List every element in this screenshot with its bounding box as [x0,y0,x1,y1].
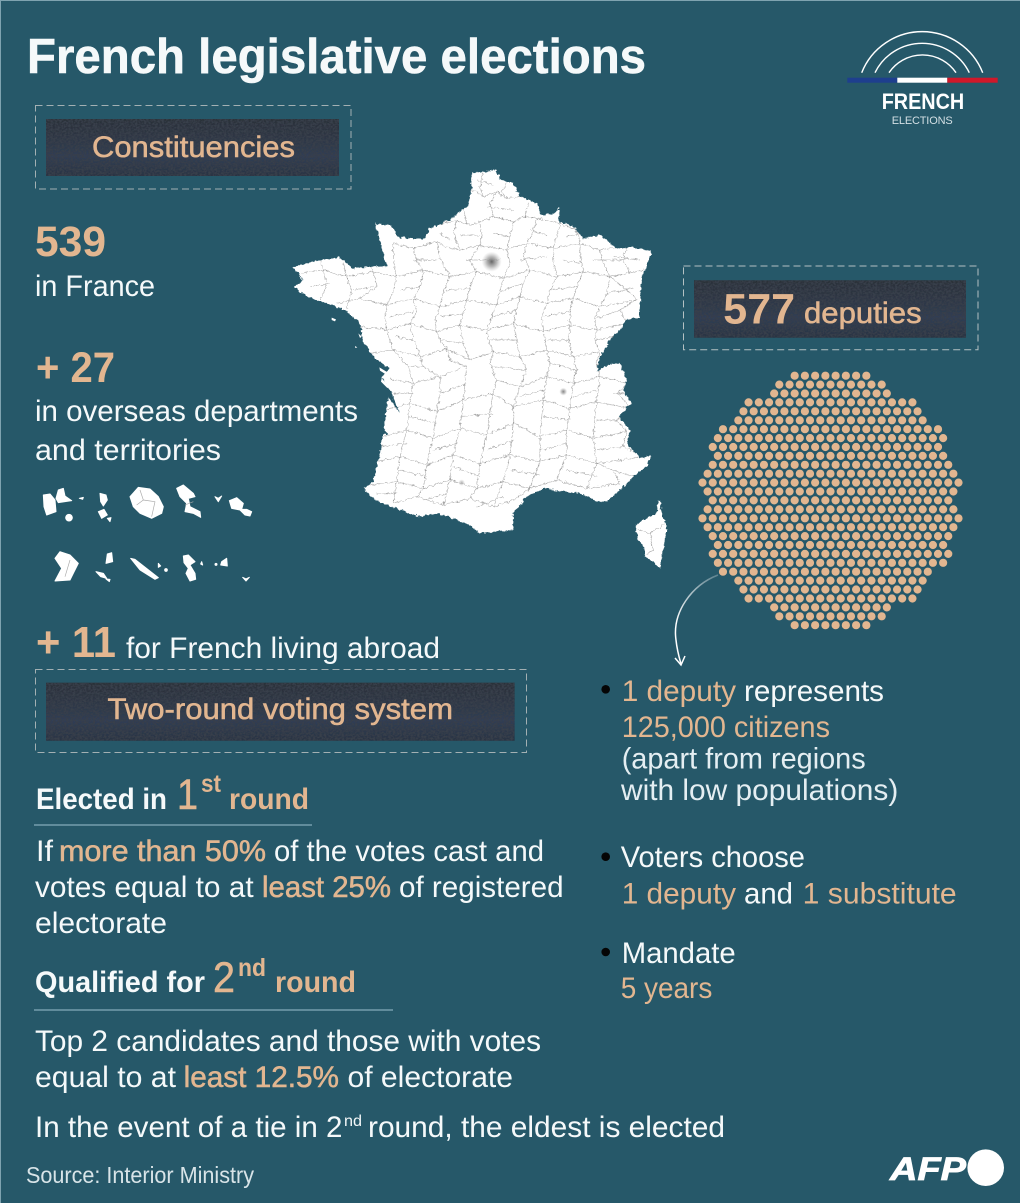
stat: +11 abroad: for French living abroad [126,632,440,665]
chart: 577 deputies dots [702,376,959,625]
Corsica [636,500,667,567]
note: deputy represents citizens: (apart from regions [622,742,866,776]
logo: French elections [847,32,998,127]
note: deputy represents citizens: 1 deputy [622,675,736,708]
panel: 577 deputies heading: 577 [723,285,795,333]
text: second round rule: equal to at [35,1061,177,1094]
stat: 539 in France [35,218,155,303]
panel: constituencies heading: Constituencies [92,131,295,164]
text: second round rule: of electorate [348,1061,513,1094]
stat: 539 in France: in France [35,270,155,303]
text: second round rule: least 12.5% [184,1061,339,1094]
arrow: from dots to deputy note [675,575,718,665]
heading: qualified for 2nd round: Qualified for [35,966,205,999]
text: first round rule: If [36,835,54,868]
panel: constituencies heading [36,106,351,189]
panel: 577 deputies heading [684,266,978,350]
stat: +11 abroad [36,618,440,667]
heading: elected in 1st round [34,770,312,825]
text: first round rule: more than 50% [59,835,266,868]
mainland France [293,169,652,533]
stat: +27 overseas: and territories [35,434,221,467]
icon: hemicycle arcs [862,32,983,73]
logo subtitle: ELECTIONS [892,115,953,127]
note: mandate [601,937,736,1005]
map: overseas departments and territories [43,485,252,582]
text: second round rule [35,1025,541,1094]
panel: 577 deputies heading: deputies [804,297,922,330]
text: tie rule: round, the eldest is elected [368,1111,725,1144]
map: France constituencies [293,169,667,567]
stat: +11 abroad: + 11 [36,618,116,667]
note: deputy represents citizens: with low populations) [620,774,898,807]
icon: tricolour bar [847,78,998,83]
heading: elected in 1st round: Elected in [36,783,167,816]
text: first round rule [35,835,564,940]
note: deputy represents citizens [601,675,898,807]
stat: +27 overseas [35,344,358,467]
text: first round rule: electorate [35,907,167,940]
stat: +27 overseas: + 27 [36,344,115,392]
note: voters choose: 1 deputy [622,877,736,910]
note: voters choose: 1 substitute [803,877,957,910]
logo wordmark: FRENCH [882,89,964,114]
note: voters choose: and [744,877,793,910]
heading: qualified for 2nd round: 2 [213,954,235,1002]
note: deputy represents citizens: 125,000 citizens [622,711,830,744]
Atlantic islands [332,318,389,388]
stat: +27 overseas: in overseas departments [35,395,358,428]
heading: elected in 1st round: st [201,770,222,798]
note: voters choose [601,841,957,910]
text: first round rule: of the votes cast and [274,835,544,868]
heading: elected in 1st round: 1 [177,771,198,819]
heading: qualified for 2nd round [34,954,393,1010]
note: mandate: Mandate [622,937,736,970]
Toulouse dense constituencies [458,479,465,486]
heading: qualified for 2nd round: round [275,966,356,999]
text: tie rule [35,1111,725,1144]
logo: AFP [889,1149,1004,1187]
text: tie rule: nd [344,1113,362,1130]
panel: two-round voting system heading: Two-round voting system [108,693,453,726]
text: first round rule: of registered [399,871,564,904]
heading: qualified for 2nd round: nd [238,954,266,982]
source: Source: Interior Ministry [26,1162,254,1188]
Lyon dense constituencies [559,388,567,396]
note: deputy represents citizens: represents [744,675,884,708]
Paris dense constituencies [482,252,502,272]
title: French legislative elections [27,30,646,84]
note: mandate: 5 years [621,972,712,1005]
logo: AFP: AFP [889,1151,967,1187]
heading: elected in 1st round: round [229,783,309,816]
note: voters choose: Voters choose [621,841,805,874]
text: first round rule: votes equal to at [35,871,254,904]
panel: two-round voting system heading [36,670,526,752]
text: tie rule: In the event of a tie in 2 [35,1111,342,1144]
text: first round rule: least 25% [262,871,391,904]
stat: 539 in France: 539 [35,218,106,266]
text: second round rule: Top 2 candidates and those with votes [35,1025,541,1058]
